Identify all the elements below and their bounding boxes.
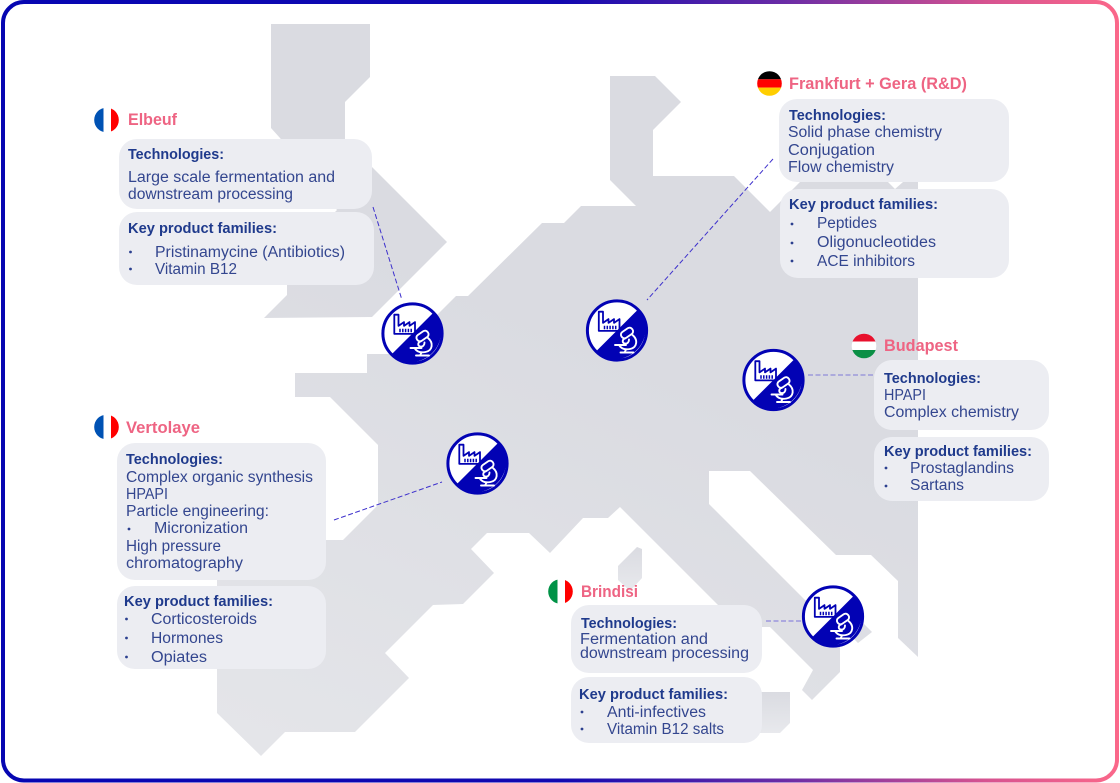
icon: Frankfurt site — [587, 301, 647, 360]
box: technologies: downstream processing — [580, 645, 749, 662]
box: key product families — [780, 189, 1009, 278]
map: United Kingdom — [264, 24, 447, 318]
box: key product families: Key product families: — [579, 686, 728, 703]
connector: Elbeuf — [373, 207, 402, 300]
icon: Budapest site — [744, 350, 803, 410]
box: technologies: Complex chemistry — [884, 404, 1019, 421]
box: key product families — [571, 677, 762, 743]
connector: Frankfurt — [647, 159, 773, 300]
box: technologies: Particle engineering: — [126, 503, 269, 520]
icon: Brindisi site — [803, 587, 863, 646]
flag: Hungary — [851, 333, 877, 359]
box: technologies — [119, 139, 372, 209]
box: technologies — [571, 605, 762, 673]
panel: Budapest — [851, 333, 1049, 501]
box: key product families: Prostaglandins — [910, 460, 1014, 477]
box: technologies: Fermentation and — [580, 631, 708, 648]
box: key product families: Peptides — [817, 215, 877, 232]
panel: Elbeuf — [94, 107, 374, 285]
connector: Budapest — [808, 374, 874, 376]
site name: Brindisi — [581, 582, 638, 601]
box: technologies: Large scale fermentation and — [128, 169, 335, 186]
box: key product families: ACE inhibitors — [817, 253, 915, 270]
box: key product families: Key product families: — [789, 196, 938, 213]
map: continental Europe — [217, 76, 918, 756]
box: technologies: High pressure — [126, 538, 221, 555]
site name: Elbeuf — [128, 110, 177, 129]
map: Sicily — [740, 692, 790, 733]
box: key product families: Anti-infectives — [607, 704, 706, 721]
site name: Budapest — [884, 336, 958, 355]
panel: Frankfurt + Gera — [757, 71, 1009, 278]
icon: Elbeuf site — [383, 304, 442, 363]
box: key product families: Vitamin B12 — [155, 261, 237, 278]
box: key product families: Pristinamycine (Antibiotics) — [155, 244, 345, 261]
map: Corsica — [618, 547, 642, 591]
box: key product families — [119, 212, 374, 285]
box: key product families — [874, 437, 1049, 501]
icon: Vertolaye site — [448, 434, 507, 493]
flag: France — [94, 108, 119, 132]
box: technologies: Complex organic synthesis — [126, 469, 313, 486]
box: technologies: chromatography — [126, 555, 243, 572]
box: technologies: Flow chemistry — [788, 159, 894, 176]
flag: France — [94, 415, 119, 439]
box: technologies: Micronization — [154, 520, 248, 537]
box: technologies: HPAPI — [126, 486, 168, 503]
box: technologies: HPAPI — [884, 387, 926, 404]
map of Europe — [217, 24, 918, 756]
flag: Italy — [548, 580, 573, 604]
box: technologies: downstream processing — [128, 186, 293, 203]
box: key product families: Key product families: — [128, 220, 277, 237]
box: technologies: Technologies: — [126, 451, 223, 468]
flag: Germany — [757, 71, 782, 97]
box: technologies — [874, 360, 1049, 430]
site name: Vertolaye — [126, 418, 200, 437]
box: technologies — [117, 443, 326, 580]
box: key product families: Oligonucleotides — [817, 234, 936, 251]
connector: Vertolaye — [334, 482, 442, 520]
box: key product families — [117, 586, 326, 669]
box: key product families: Corticosteroids — [151, 611, 257, 628]
box: key product families: Sartans — [910, 477, 964, 494]
site name: Frankfurt + Gera (R&D) — [789, 74, 967, 93]
panel: Brindisi — [548, 579, 762, 743]
panel: Vertolaye — [94, 414, 326, 669]
box: key product families: Key product families: — [124, 593, 273, 610]
box: key product families: Vitamin B12 salts — [607, 721, 724, 738]
box: technologies — [779, 99, 1009, 182]
box: technologies: Technologies: — [789, 107, 886, 124]
box: technologies: Solid phase chemistry — [788, 124, 942, 141]
box: key product families: Hormones — [151, 630, 223, 647]
box: key product families: Opiates — [151, 649, 207, 666]
box: technologies: Technologies: — [581, 615, 677, 632]
box: technologies: Technologies: — [128, 146, 224, 163]
box: key product families: Key product families: — [884, 443, 1032, 460]
box: technologies: Conjugation — [788, 142, 875, 159]
connector: Brindisi — [766, 620, 802, 622]
box: technologies: Technologies: — [884, 370, 981, 387]
